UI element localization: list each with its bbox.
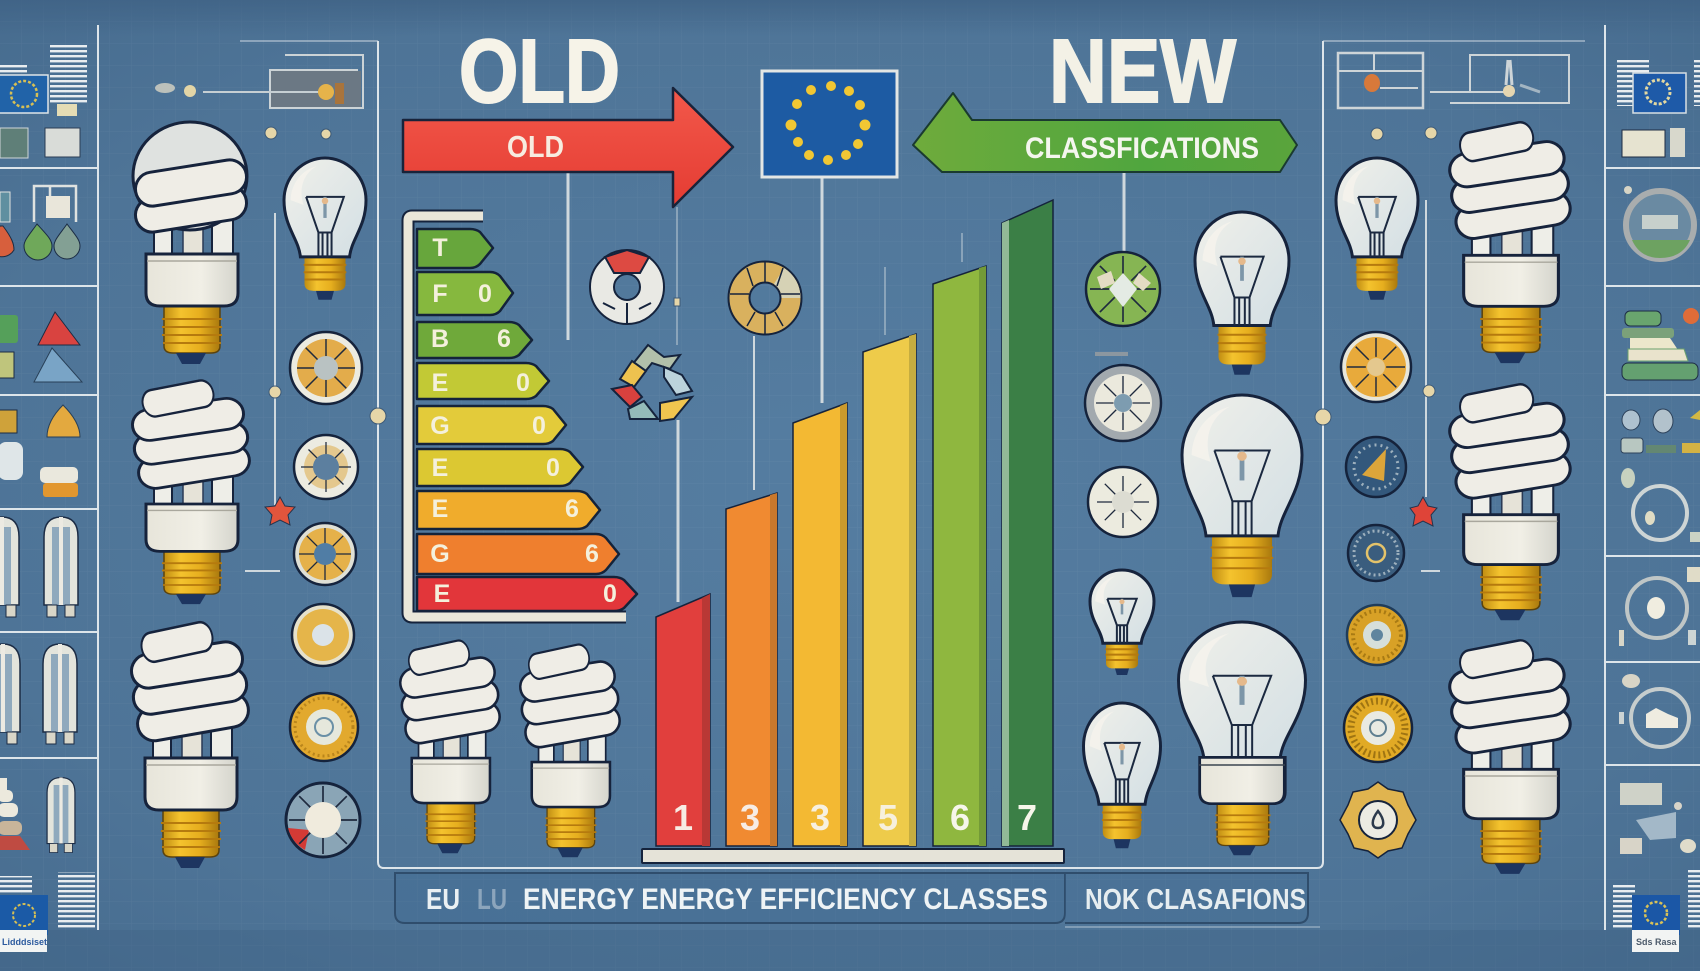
sidebar: ring 1 [1633,486,1700,542]
incandescent B [1182,395,1302,597]
sidebar: EU flag bottom [0,872,95,952]
ladder letters: E [432,369,448,397]
caption: LU: LU [477,884,507,916]
CFL bulb 6 [1447,120,1573,363]
bar 2 orange [726,493,777,846]
bar platform [642,849,1064,863]
sidebar: hangers and drops [0,186,80,260]
bar 6 green: 7 [1017,797,1037,838]
incandescent left [284,158,366,300]
badge R2 [1346,437,1406,497]
badges: right column [1340,332,1416,858]
sidebar: EU building and flag [0,45,87,158]
icon: life ring [602,250,652,323]
CFL bulbs: centre pair [398,639,622,857]
ladder letters: 0 [532,412,546,440]
incandescent E with collar [1178,622,1306,855]
bar 6 green [1002,200,1053,846]
sidebar: capsules row 2 [0,644,77,744]
CFL bulb 7 [1447,382,1573,620]
bar 1 red [656,594,710,846]
incandescent C [1090,570,1154,675]
sidebar: EU flag bottom: Sds Rasa [1636,937,1678,947]
arrow label: OLD: OLD [507,129,564,164]
badge R1 [1341,332,1411,402]
badge R4 [1347,605,1407,665]
sidebar: shapes [0,312,82,382]
sidebar: ring 3 [1619,674,1689,747]
badge L4 [292,604,354,666]
connector lines [245,172,1440,602]
badge R6 spiky [1340,782,1416,858]
ladder letters: B [431,325,449,353]
energy label ladder [408,216,637,617]
sidebar: EU flag bottom [1613,870,1700,952]
bar 5 lime [933,266,986,846]
CFL bulbs: right column [1447,120,1573,874]
ladder letters: G [430,412,450,440]
bar 4 yellow [863,334,916,846]
badges: centre column [1085,252,1161,537]
bar 1 red: 1 [673,797,693,838]
badge L5 [290,693,358,761]
arrow: green classifications [913,93,1297,172]
sidebar: stack [1622,308,1699,380]
heading: NEW: NEW [1049,22,1236,122]
sidebar: cone and tubes [0,405,80,497]
ladder letters: F [432,280,448,308]
CFL bulb 5 [518,643,622,857]
incandescent right [1336,158,1418,300]
left sidebar icons [0,45,95,952]
badge L3 [294,523,356,585]
bar 3 amber [793,403,847,846]
bar 5 lime: 6 [950,797,970,838]
ladder letters: 0 [546,454,560,482]
ladder letters: T [432,234,448,262]
star marker right [1410,497,1437,526]
ladder letters: E [432,454,448,482]
badges: left column [286,332,362,857]
connector nodes [265,127,1437,425]
caption: new classifications: NOK CLASAFIONS [1085,884,1306,916]
sidebar: stack and small capsule [0,778,75,852]
ladder letters: E [432,495,448,523]
incandescent A [1195,212,1289,375]
CFL bulb 8 [1447,638,1573,874]
widget: top left [155,55,363,108]
bar 4 yellow: 5 [878,797,898,838]
ladder letters: 0 [516,369,530,397]
ladder letters: 6 [565,495,579,523]
incandescent bulbs [284,158,1418,855]
badge L6 [286,783,360,857]
sidebar: ring 2 [1619,567,1700,646]
ladder letters: 0 [478,280,492,308]
right sidebar icons [1613,60,1700,952]
ladder letters: 6 [585,540,599,568]
badge R3 [1348,525,1404,581]
caption: energy efficiency classes: ENERGY ENERGY EFFICIENCY CLASSES [523,883,1048,916]
ladder letters: 6 [497,325,511,353]
EU flag [762,71,897,177]
badge R5 [1344,694,1412,762]
badge green [1086,252,1160,326]
arrow: red OLD [403,88,733,207]
sidebar: EU building and flag [1617,60,1700,157]
CFL bulb 3 [129,620,251,868]
CFL bulb 2 [130,379,252,604]
bar 2 orange: 3 [740,797,760,838]
ladder letters [430,234,617,608]
widget: top right [1338,53,1569,108]
ladder letters: 0 [603,580,617,608]
sidebar: small icons [1621,409,1700,488]
icon: recycle [612,345,692,421]
badge white [1088,467,1158,537]
sidebar: ring landscape [1624,186,1694,259]
caption: EU: EU [426,884,460,916]
ladder letters: G [430,540,450,568]
icon: gold ring [730,262,800,334]
CFL bulb 1 with dome [133,122,249,364]
CFL bulb 4 [398,639,502,853]
badge white grey [1085,365,1161,441]
CFL bulbs: left column [129,122,252,868]
heading: OLD: OLD [459,22,620,122]
sidebar: small fragments [1620,783,1696,854]
arrow label: classifications: CLASSFICATIONS [1025,132,1259,165]
bar 3 amber: 3 [810,797,830,838]
bar chart [642,200,1064,863]
sidebar: EU flag bottom: Lidddsiset [2,937,47,947]
caption panel [395,873,1308,923]
incandescent D [1084,703,1160,848]
sidebar: capsules row 1 [0,517,78,617]
badge L2 [294,435,358,499]
badge L1 [290,332,362,404]
ladder letters: E [434,580,450,608]
star marker left [265,497,295,525]
